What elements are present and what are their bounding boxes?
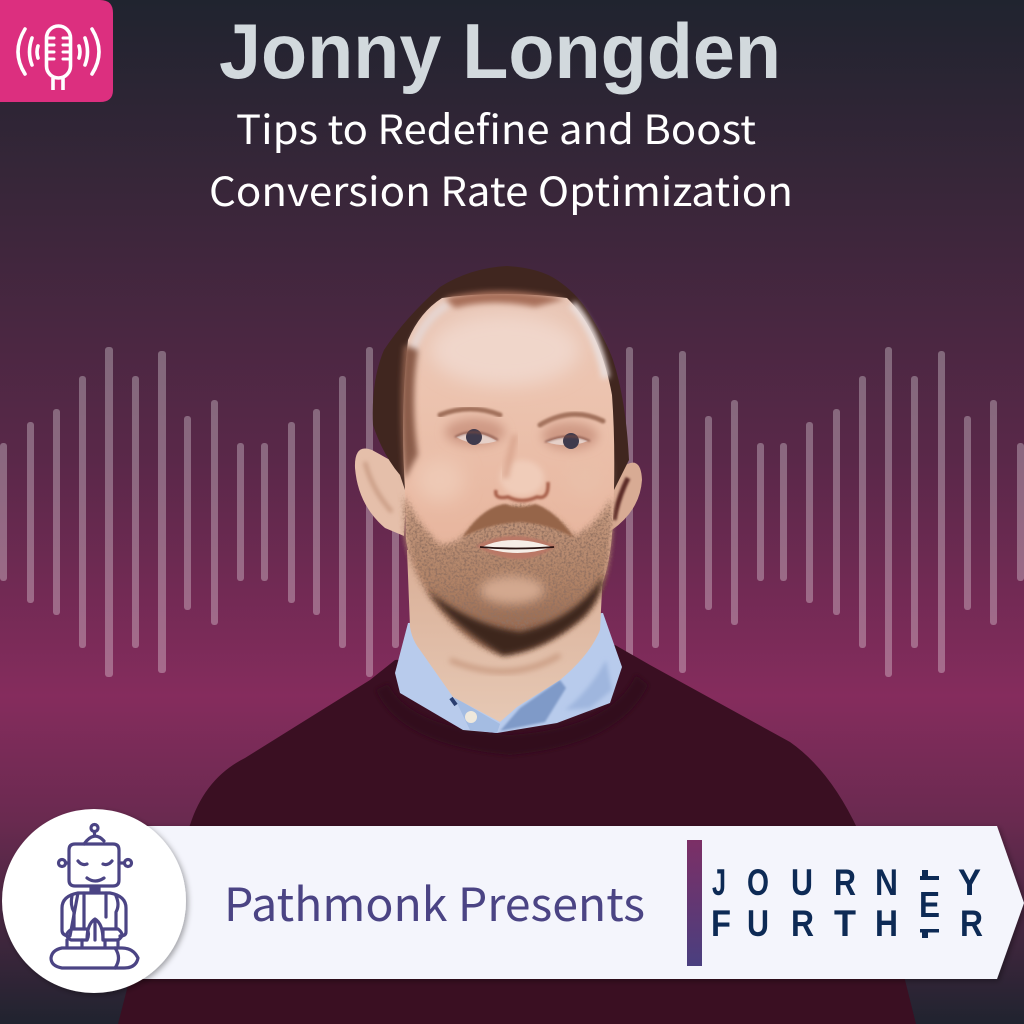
title: Jonny Longden bbox=[219, 7, 781, 95]
logo: Journey Further: Y bbox=[958, 862, 981, 903]
presenter text: Pathmonk Presents bbox=[224, 869, 645, 935]
subtitle bbox=[209, 98, 793, 218]
nose bbox=[496, 435, 548, 500]
rotated E fragments bbox=[920, 870, 939, 938]
left eye socket bbox=[445, 418, 505, 446]
temple stubble bbox=[401, 345, 418, 480]
logo: Journey Further: R bbox=[960, 903, 983, 944]
logo: Journey Further: J bbox=[712, 862, 726, 903]
logo: Journey Further: T bbox=[834, 903, 856, 944]
avatar circle bbox=[2, 809, 186, 993]
dark beard band bbox=[427, 575, 604, 655]
subtitle: Conversion Rate Optimization bbox=[209, 160, 793, 218]
icon: microphone bbox=[18, 26, 99, 90]
face bbox=[403, 294, 614, 653]
logo: Journey Further: H bbox=[875, 903, 898, 944]
right eye bbox=[546, 437, 588, 445]
icon: meditating robot bbox=[51, 824, 138, 968]
left ear bbox=[355, 448, 408, 536]
logo: Journey Further bbox=[687, 840, 983, 966]
subtitle: Tips to Redefine and Boost bbox=[236, 98, 756, 156]
chin skin patch bbox=[480, 576, 544, 604]
logo: Journey Further: R bbox=[791, 903, 814, 944]
mouth bbox=[476, 536, 556, 559]
logo: Journey Further: N bbox=[875, 862, 898, 903]
logo: Journey Further: U bbox=[747, 903, 769, 944]
portrait of Jonny Longden bbox=[118, 266, 916, 1024]
logo: Journey Further: E bbox=[919, 884, 940, 925]
neck bbox=[407, 550, 604, 722]
sweater bbox=[118, 645, 916, 1024]
right eyebrow bbox=[540, 414, 603, 425]
beard bbox=[404, 495, 612, 655]
shirt collar bbox=[395, 613, 622, 733]
neck crease bbox=[450, 655, 560, 671]
logo: Journey Further: R bbox=[834, 862, 856, 903]
cheek light right bbox=[567, 460, 603, 496]
banner bbox=[140, 826, 1024, 979]
left eye bbox=[456, 433, 497, 444]
podcast badge bbox=[0, 0, 113, 102]
left eyebrow bbox=[440, 409, 500, 415]
hairline stubble bbox=[445, 291, 565, 308]
hair bbox=[373, 266, 629, 490]
moustache bbox=[462, 504, 574, 538]
logo: Journey Further: O bbox=[747, 862, 769, 903]
right eye socket bbox=[542, 422, 598, 450]
forehead highlight bbox=[430, 314, 580, 386]
collar placket and fold shadows bbox=[500, 680, 566, 731]
right ear bbox=[606, 463, 642, 530]
cheek light bbox=[416, 458, 464, 502]
logo: Journey Further: U bbox=[791, 862, 813, 903]
sound wave bars bbox=[0, 347, 1024, 677]
logo: Journey Further: F bbox=[711, 903, 731, 944]
